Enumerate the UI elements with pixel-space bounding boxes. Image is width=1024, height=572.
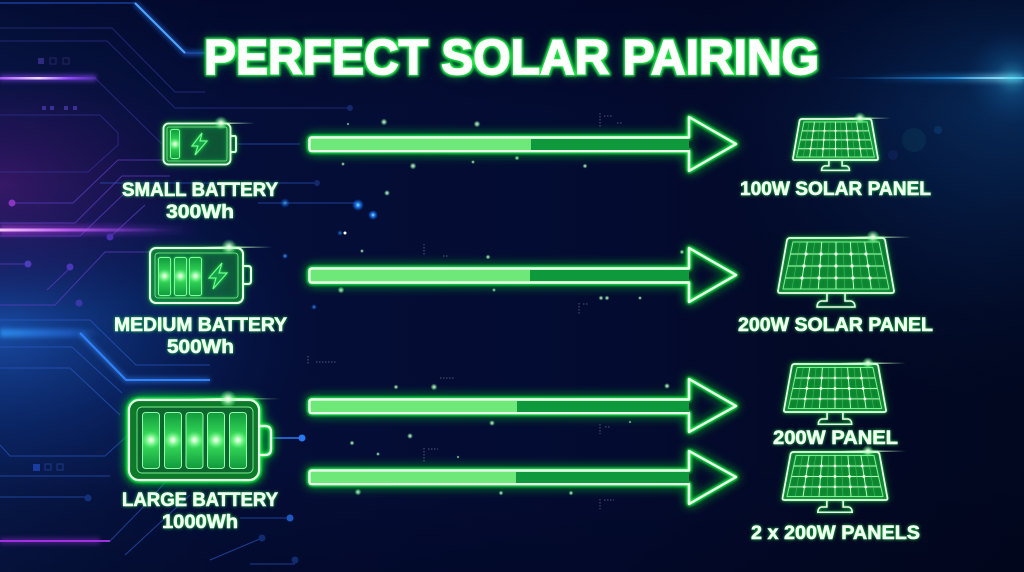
panel icon: 200W <box>784 364 886 424</box>
label: 2 x 200W panels: 2 x 200W PANELS <box>751 523 920 544</box>
panel icon: 200W <box>778 238 894 307</box>
cell highlights <box>142 431 247 449</box>
label: 200W panel: 200W PANEL <box>773 428 898 449</box>
label: 100W solar panel: 100W SOLAR PANEL <box>740 179 931 200</box>
circuit lines on left <box>0 28 358 564</box>
circuit nodes and squares <box>8 58 353 564</box>
label: large battery: 1000Wh <box>162 512 238 533</box>
panel icon: 100W <box>793 119 878 170</box>
particles <box>280 113 684 509</box>
flare <box>840 357 906 369</box>
label: large battery <box>122 490 278 533</box>
flare <box>840 445 906 457</box>
label: 200W solar panel: 200W SOLAR PANEL <box>738 315 933 336</box>
solar panel 1 <box>740 112 931 200</box>
small battery <box>122 116 278 223</box>
large battery <box>122 390 280 533</box>
panel icon: 2 x 200W <box>783 452 887 512</box>
battery icon: small <box>164 124 236 164</box>
arrow 1 <box>310 117 736 171</box>
solar panel 2 <box>738 230 933 336</box>
label: small battery: 300Wh <box>166 202 234 223</box>
flare <box>845 230 911 244</box>
flare <box>835 112 891 124</box>
lens flare spots at right <box>888 126 942 160</box>
label: large battery: LARGE BATTERY <box>122 490 278 511</box>
battery icon: large <box>129 400 271 480</box>
cell highlight <box>169 138 181 150</box>
arrow 3 <box>310 379 736 432</box>
solar panel 4 <box>751 445 920 544</box>
medium battery <box>114 239 287 358</box>
arrow 4 <box>310 451 736 504</box>
label: small battery <box>122 180 278 223</box>
solar panel 3 <box>773 357 906 449</box>
flare <box>195 116 255 130</box>
battery icon: medium <box>150 248 251 303</box>
label: medium battery <box>114 315 287 358</box>
label: medium battery: MEDIUM BATTERY <box>114 315 287 336</box>
label: small battery: SMALL BATTERY <box>122 180 278 201</box>
cell highlights <box>158 269 202 283</box>
flare <box>190 390 280 408</box>
title: PERFECT SOLAR PAIRING <box>204 31 819 85</box>
flare <box>200 239 272 255</box>
arrow 2 <box>310 248 736 302</box>
label: medium battery: 500Wh <box>167 337 234 358</box>
